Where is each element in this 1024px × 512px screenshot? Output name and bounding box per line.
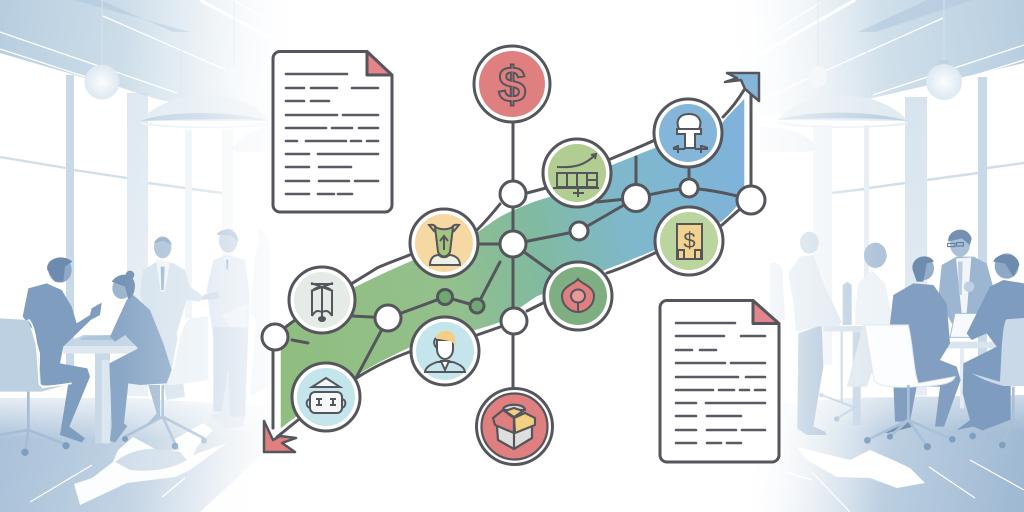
right chair <box>969 318 1024 448</box>
high table <box>819 282 867 425</box>
folded corner <box>367 52 392 75</box>
chair right of woman <box>122 317 208 449</box>
people group right <box>770 230 1024 450</box>
seated man right <box>957 253 1024 433</box>
far standing man <box>250 230 270 397</box>
icon: growth chart table <box>543 139 611 207</box>
people group left <box>0 229 270 456</box>
icon: mushroom device <box>654 99 722 167</box>
inner links <box>292 231 579 378</box>
arrow shafts <box>273 74 751 428</box>
pendant lamps <box>84 0 280 152</box>
background: left office scene <box>0 0 330 512</box>
icon: onion seed <box>544 262 612 330</box>
vertical spine <box>512 122 514 388</box>
standing thin man <box>788 232 842 435</box>
upper ribbon outline <box>283 90 744 329</box>
standing man back <box>140 236 203 400</box>
icon: money bag person <box>410 209 478 277</box>
background: right office scene <box>700 0 1024 512</box>
right window frame <box>813 77 1024 397</box>
standing man front <box>202 229 250 428</box>
document lines right <box>676 323 765 443</box>
left chair seat <box>0 318 72 392</box>
icon: person avatar <box>411 317 479 385</box>
seated man centre <box>885 256 961 433</box>
right table and laptop <box>947 313 999 408</box>
table <box>63 335 138 443</box>
seated man <box>23 257 102 442</box>
icon: dollar coin: $ <box>498 57 526 113</box>
right links <box>579 157 751 231</box>
right pendant lamps <box>760 0 962 152</box>
far pale figure <box>770 262 785 320</box>
icon: gray lantern <box>289 267 355 333</box>
icon: dollar document: $ <box>683 228 696 253</box>
icon: robot head <box>292 363 360 431</box>
network connector lines <box>273 74 751 437</box>
icon: dollar coin <box>474 46 550 122</box>
centre chair <box>864 325 956 450</box>
left ceiling <box>0 0 310 125</box>
right floor <box>700 395 1024 512</box>
window frame <box>0 75 233 403</box>
seated woman <box>109 271 172 443</box>
icon: open box <box>476 388 552 464</box>
left floor <box>0 398 330 512</box>
icon: dollar document <box>655 207 723 275</box>
growth ribbon band <box>280 97 745 430</box>
folded corner right <box>753 300 779 324</box>
document: top left <box>273 52 392 212</box>
arrow head: up right <box>725 73 759 101</box>
lower ribbon outline <box>277 209 740 437</box>
arrow head: down left <box>264 421 296 452</box>
network nodes <box>262 179 765 350</box>
sunlight patches on right floor <box>797 447 925 488</box>
standing man with glasses <box>938 230 994 323</box>
sunlight patches on left floor <box>74 423 227 505</box>
woman <box>847 243 892 387</box>
right ceiling <box>714 0 1024 125</box>
document: bottom right <box>660 300 779 462</box>
left chair <box>0 392 70 456</box>
document lines <box>286 74 378 194</box>
